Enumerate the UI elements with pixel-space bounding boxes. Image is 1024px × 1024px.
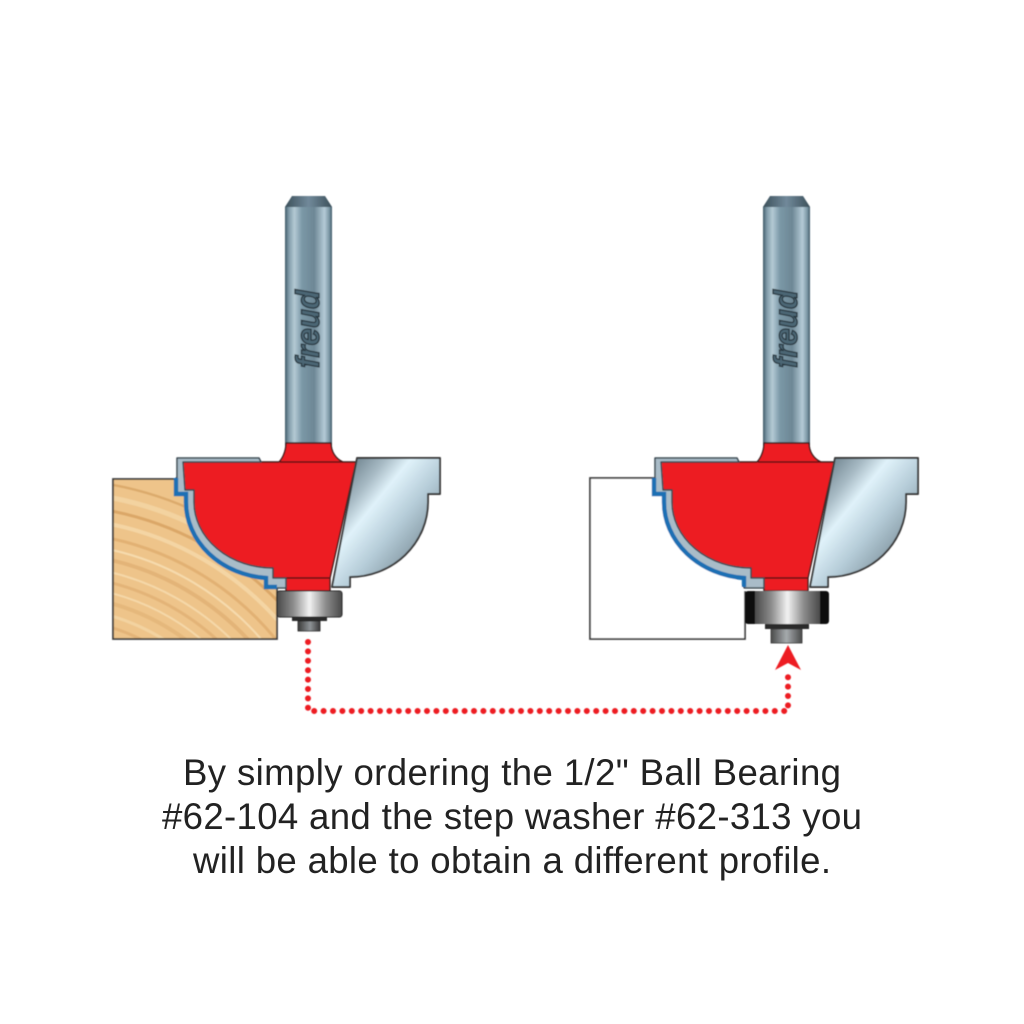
caption: #62-104 and the step washer #62-313 you [162,796,862,837]
neck and red body [661,443,834,591]
left cutter with blue profile [176,458,286,588]
shank [285,196,332,446]
wood workpiece [110,479,280,642]
neck and red body [183,443,356,591]
shank [763,196,810,446]
caption [162,752,862,881]
caption: By simply ordering the 1/2" Ball Bearing [183,752,841,793]
right silver cutter [810,458,918,587]
illustration: router bits [110,196,918,711]
ball bearing [277,591,342,631]
empty workpiece outline [590,478,745,639]
right router bit [654,196,918,643]
shank: freud [767,289,804,368]
caption: will be able to obtain a different profile. [192,840,831,881]
left router bit [176,196,440,631]
ball bearing with step washer [745,591,829,643]
dotted arrow [308,642,801,711]
shank: freud [289,289,326,368]
right silver cutter [332,458,440,587]
left cutter with blue profile [654,458,764,588]
